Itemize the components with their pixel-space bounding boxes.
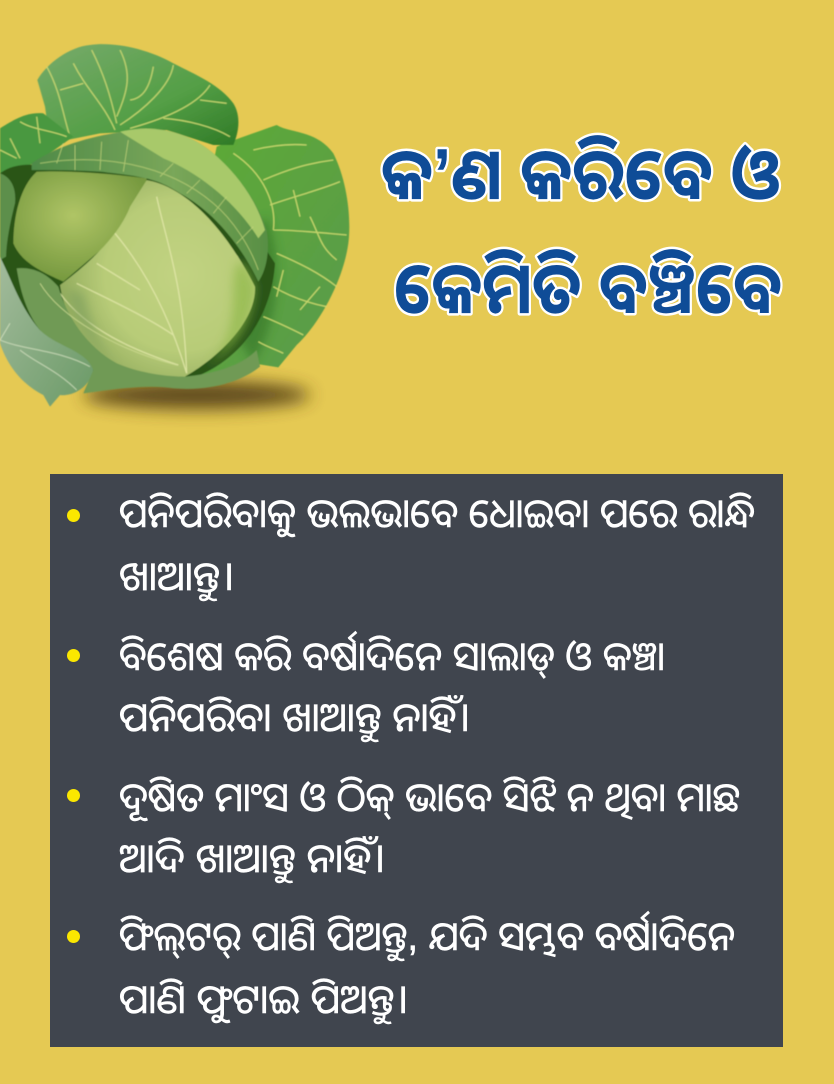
lower left leaf bbox=[0, 257, 93, 407]
tip 3 line 1: ଦୂଷିତ ମାଂସ ଓ ଠିକ୍ ଭାବେ ସିଝି ନ ଥିବା ମାଛ bbox=[119, 776, 740, 821]
tip 3 line 2: ଆଦି ଖାଆନ୍ତୁ ନାହିଁ। bbox=[119, 835, 385, 883]
tip 4 line 1: ଫିଲ୍‌ଟର୍ ପାଣି ପିଅନ୍ତୁ, ଯଦି ସମ୍ଭବ ବର୍ଷାଦିନେ bbox=[119, 911, 735, 961]
right outer leaf bbox=[180, 125, 349, 385]
tip 4 line 2: ପାଣି ଫୁଟାଇ ପିଅନ୍ତୁ। bbox=[119, 978, 408, 1024]
cabbage shadow bbox=[83, 381, 310, 409]
title line 1: କ’ଣ କରିବେ ଓ bbox=[381, 135, 781, 215]
collar leaf bbox=[32, 129, 268, 282]
illustration: cabbage bbox=[0, 43, 350, 422]
panel: advice list bbox=[50, 474, 783, 1047]
far left leaf edge bbox=[0, 173, 15, 260]
tip 1 line 1: ପନିପରିବାକୁ ଭଲଭାବେ ଧୋଇବା ପରେ ରାନ୍ଧି bbox=[119, 492, 755, 537]
dark cavity bbox=[0, 165, 275, 380]
title bbox=[380, 132, 783, 329]
front lower leaf bbox=[17, 268, 260, 393]
bullet 1 bbox=[67, 509, 80, 522]
left outer leaf bbox=[0, 113, 73, 177]
top outer leaf bbox=[37, 44, 238, 145]
inner head, main bbox=[60, 180, 255, 377]
bullet 3 bbox=[67, 789, 80, 802]
tip 2 line 2: ପନିପରିବା ଖାଆନ୍ତୁ ନାହିଁ। bbox=[119, 694, 470, 742]
tip 2 line 1: ବିଶେଷ କରି ବର୍ଷାଦିନେ ସାଲାଡ୍ ଓ କଞ୍ଚା bbox=[119, 631, 665, 679]
bullet 4 bbox=[67, 930, 80, 943]
title line 2: କେମିତି ବଞ୍ଚିବେ bbox=[394, 249, 782, 329]
bullet 2 bbox=[67, 649, 80, 662]
tip 1 line 2: ଖାଆନ୍ତୁ। bbox=[119, 555, 234, 601]
inner head, left bbox=[13, 171, 147, 282]
